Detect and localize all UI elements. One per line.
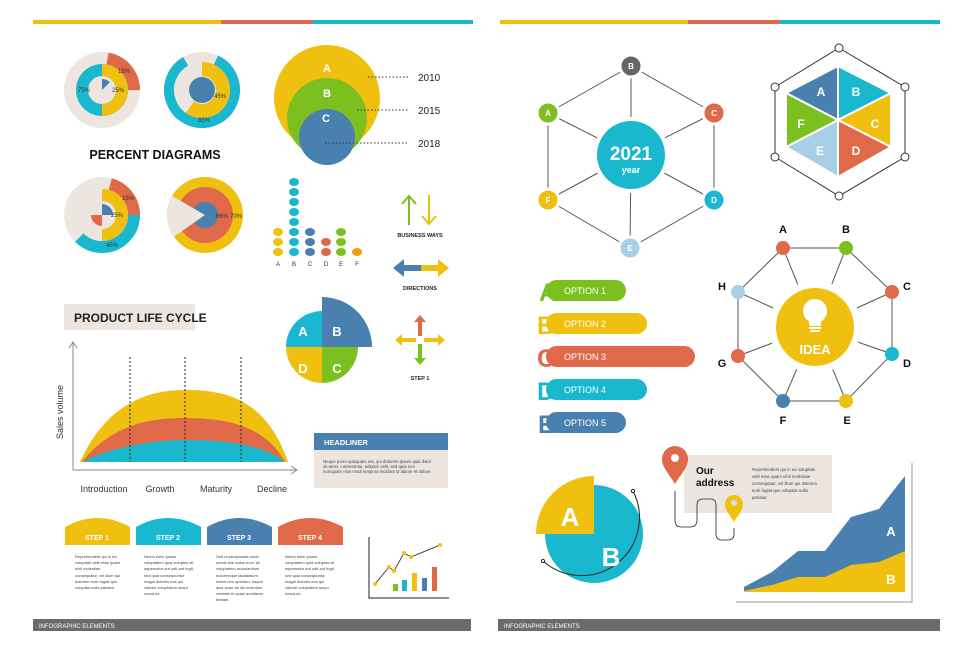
donut chart 1 <box>64 52 140 128</box>
step 3 <box>207 518 272 602</box>
step 4: sed quia consequuntur <box>285 573 326 578</box>
icon: business ways arrows: BUSINESS WAYS <box>397 233 443 239</box>
step 1: voluptate velit esse quam <box>75 560 121 565</box>
callout: headliner: Neque porro quisquam est, qui dolorem ipsum quia dolor <box>323 459 432 464</box>
option bars: D <box>537 378 555 406</box>
callout: our address: Reprehenderit qui in ea voluptate <box>752 467 816 472</box>
quadrant pie ABCD <box>286 297 372 383</box>
donut chart 1: 15% <box>118 69 131 75</box>
nested circles diagram: 2015 <box>418 106 441 117</box>
callout: headliner: sit amet, consectetur, adipisci velit, sed quia non <box>323 464 416 469</box>
step 2: voluptatem quia voluptas sit <box>144 560 194 565</box>
callout: our address: eum fugiat quo voluptas nulla <box>752 488 809 493</box>
nested circles diagram: 2018 <box>418 139 441 150</box>
step 4 <box>278 518 343 596</box>
heading: product life cycle <box>64 304 207 330</box>
step 2 <box>136 518 201 596</box>
donut chart 3: 15% <box>122 196 135 202</box>
donut chart 2 <box>158 46 246 134</box>
callout: our address: velit esse quam nihil molestiae <box>752 474 811 479</box>
step 4: aspernatur aut odit aut fugit, <box>285 566 335 571</box>
quadrant pie ABCD: B <box>332 324 342 339</box>
option bars: OPTION 3 <box>564 352 606 362</box>
nested circles diagram: A <box>323 63 331 75</box>
donut chart 3 <box>63 176 141 254</box>
quadrant pie ABCD: D <box>298 361 308 376</box>
pie AB with arc: A <box>561 502 580 532</box>
idea network: F <box>780 415 787 427</box>
footer bar left: INFOGRAPHIC ELEMENTS <box>39 624 115 630</box>
chart: product life cycle area: Decline <box>257 484 287 494</box>
option bars: A <box>539 279 557 307</box>
hexagon network 2021: E <box>627 244 633 253</box>
hexagon network 2021: 2021 <box>610 144 653 165</box>
option bars: C <box>537 345 555 373</box>
step 1: voluptas nulla pariatur. <box>75 585 115 590</box>
idea network <box>718 224 911 427</box>
donut chart 4: 66% <box>216 214 229 220</box>
hexagon network 2021: D <box>711 196 717 205</box>
chart: product life cycle area: Introduction <box>80 484 128 494</box>
callout: our address: Our <box>696 466 714 477</box>
step 2: aspernatur aut odit aut fugit, <box>144 566 194 571</box>
idea network: D <box>903 358 911 370</box>
idea network: E <box>843 415 851 427</box>
area chart A B: B <box>886 572 896 587</box>
chart: product life cycle area: Sales volume <box>55 385 65 439</box>
hexagon network 2021: B <box>628 62 634 71</box>
step 3: veritatis et quasi architecto <box>216 591 264 596</box>
icon: step 1 cross arrows: STEP 1 <box>411 376 429 382</box>
step 2: nesciunt. <box>144 591 160 596</box>
hexagon pie: D <box>852 144 861 158</box>
donut chart 3: 25% <box>111 213 124 219</box>
step 3: Sed ut perspiciatis unde <box>216 554 259 559</box>
hexagon network 2021: year <box>622 165 641 175</box>
step 1: Reprehenderit qui in ea <box>75 554 117 559</box>
dot bar chart: D <box>324 262 329 268</box>
hexagon pie: E <box>816 144 824 158</box>
step 2: Nemo enim ipsam <box>144 554 177 559</box>
dot bar chart: A <box>276 262 280 268</box>
chart: product life cycle area: Maturity <box>200 484 232 494</box>
hexagon pie: B <box>852 85 861 99</box>
hexagon network 2021 <box>537 55 725 259</box>
step 2: magni dolores eos qui <box>144 579 183 584</box>
area chart A B <box>736 463 912 602</box>
callout: our address: pariatur. <box>752 495 768 500</box>
step 1: consequatur, vel illum qui <box>75 573 120 578</box>
top color bar right <box>500 20 940 24</box>
top color bar left <box>33 20 473 24</box>
footer bar left <box>33 619 471 631</box>
nested circles diagram: C <box>322 113 330 125</box>
hexagon network 2021: F <box>546 196 551 205</box>
hexagon pie: A <box>817 85 826 99</box>
icon: directions arrow: DIRECTIONS <box>403 286 437 292</box>
option bars: OPTION 4 <box>564 385 606 395</box>
option bars: OPTION 1 <box>564 286 606 296</box>
step 1: STEP 1 <box>85 535 109 542</box>
callout: headliner: HEADLINER <box>324 438 368 447</box>
idea network: B <box>842 224 850 236</box>
title: percent diagrams: PERCENT DIAGRAMS <box>89 148 221 162</box>
callout: our address: address <box>696 478 735 489</box>
donut chart 3: 45% <box>106 243 119 249</box>
hexagon network 2021: C <box>711 109 717 118</box>
step 1 <box>65 518 130 590</box>
dot bar chart <box>273 178 362 268</box>
step 3: totam rem aperiam, eaque <box>216 579 264 584</box>
step 3: ipsa quae ab illo inventore <box>216 585 263 590</box>
dot bar chart: E <box>339 262 343 268</box>
step 3: STEP 3 <box>227 535 251 542</box>
step 4: magni dolores eos qui <box>285 579 324 584</box>
dot bar chart: C <box>308 262 313 268</box>
donut chart 1: 25% <box>112 88 125 94</box>
hexagon network 2021: A <box>545 109 551 118</box>
step 4: ratione voluptatem sequi <box>285 585 329 590</box>
icon: directions arrow <box>393 259 449 292</box>
idea network: H <box>718 281 726 293</box>
step 4: nesciunt. <box>285 591 301 596</box>
donut chart 1: 75% <box>78 88 91 94</box>
nested circles diagram <box>274 45 441 165</box>
idea network: C <box>903 281 911 293</box>
step 1: dolorem eum fugiat quo <box>75 579 118 584</box>
footer bar right: INFOGRAPHIC ELEMENTS <box>504 624 580 630</box>
step 4: Nemo enim ipsam <box>285 554 318 559</box>
steps row <box>65 518 343 602</box>
step 2: ratione voluptatem sequi <box>144 585 188 590</box>
icon: business ways arrows <box>397 195 443 239</box>
callout: our address <box>662 446 832 540</box>
callout: headliner: numquam eius modi tempora incidunt ut labore et dolore. <box>323 469 432 474</box>
chart: product life cycle area <box>55 342 297 494</box>
idea network: IDEA <box>799 342 831 357</box>
option bars: OPTION 2 <box>564 319 606 329</box>
quadrant pie ABCD: A <box>298 324 308 339</box>
donut chart 4 <box>167 177 243 253</box>
step 2: sed quia consequuntur <box>144 573 185 578</box>
step 4: voluptatem quia voluptas sit <box>285 560 335 565</box>
step 3: beatae. <box>216 597 229 602</box>
step 3: doloremque laudantium, <box>216 573 259 578</box>
hexagon pie: F <box>797 117 805 131</box>
step 3: voluptatem accusantium <box>216 566 260 571</box>
pie AB with arc <box>536 476 643 583</box>
option bars: OPTION 5 <box>564 418 606 428</box>
option bars: B <box>537 312 555 340</box>
callout: headliner <box>314 433 448 488</box>
hexagon pie: C <box>871 117 880 131</box>
pie AB with arc: B <box>602 542 620 572</box>
dot bar chart: F <box>355 262 359 268</box>
donut chart 4: 70% <box>230 214 243 220</box>
step 3: omnis iste natus error sit <box>216 560 260 565</box>
option bars: E <box>538 411 555 439</box>
option bars <box>537 279 695 439</box>
donut chart 2: 85% <box>198 118 211 124</box>
nested circles diagram: 2010 <box>418 73 441 84</box>
donut chart 2: 45% <box>214 94 227 100</box>
hexagon pie <box>771 44 909 200</box>
callout: our address: consequatur, vel illum qui dolorem <box>752 481 817 486</box>
step 1: nihil molestiae <box>75 566 101 571</box>
dot bar chart: B <box>292 262 296 268</box>
footer bar right <box>498 619 940 631</box>
step 4: STEP 4 <box>298 535 322 542</box>
icon: step 1 cross arrows <box>395 315 445 382</box>
idea network: G <box>718 358 726 370</box>
heading: product life cycle: PRODUCT LIFE CYCLE <box>74 311 207 325</box>
idea network: A <box>779 224 787 236</box>
chart: small line and bar <box>369 537 449 598</box>
step 2: STEP 2 <box>156 535 180 542</box>
chart: product life cycle area: Growth <box>145 484 175 494</box>
quadrant pie ABCD: C <box>332 361 342 376</box>
area chart A B: A <box>886 524 896 539</box>
nested circles diagram: B <box>323 88 331 100</box>
